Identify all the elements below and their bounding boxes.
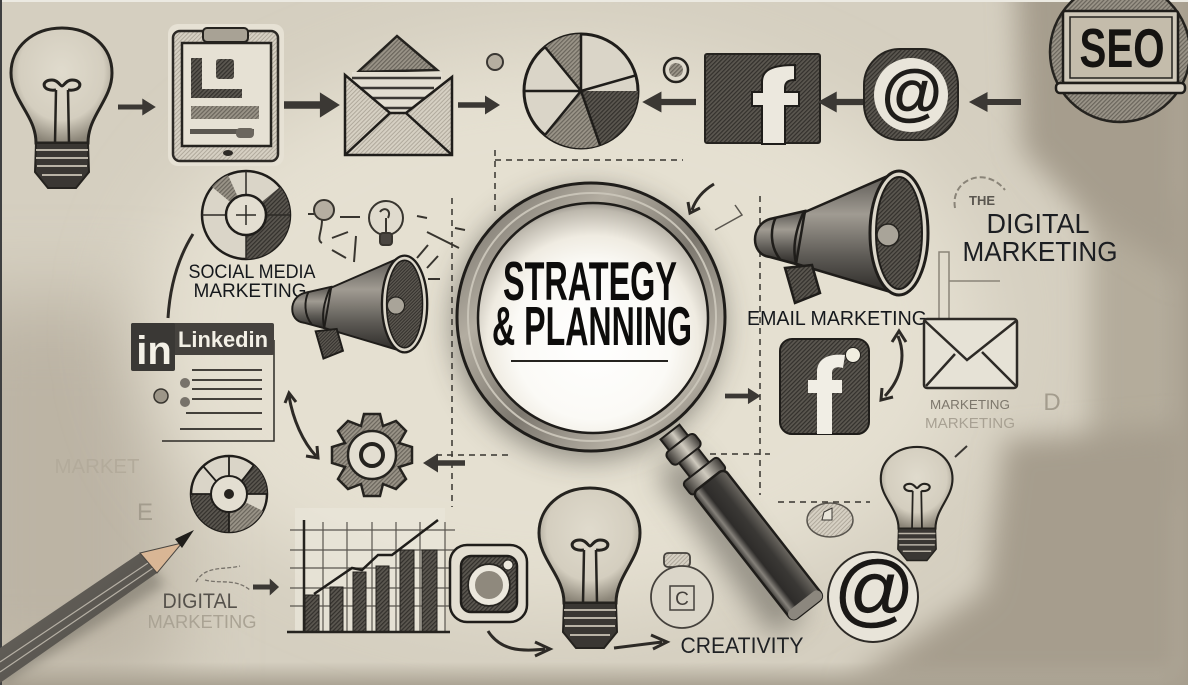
faded market label: MARKET: [54, 456, 140, 478]
icon: facebook square top: [705, 54, 820, 144]
label: creativity: CREATIVITY: [680, 633, 804, 658]
icon: facebook square: [780, 339, 869, 434]
icon: instagram: [450, 545, 527, 622]
heading: email marketing: EMAIL MARKETING: [747, 308, 927, 330]
arrow: curved near lens: [688, 184, 714, 213]
faded labels: MARKETING: [930, 397, 1010, 412]
magnifier handle: [653, 418, 826, 623]
heading: digital marketing: DIGITAL: [986, 208, 1090, 239]
heading: social media marketing: MARKETING: [194, 281, 306, 302]
icon: open envelope: [345, 36, 452, 155]
icon: at symbol top: [864, 49, 958, 140]
icon: megaphone right: [755, 171, 928, 303]
arrow: tablet to envelope: [284, 92, 340, 118]
arrow: envelope to pie: [458, 96, 500, 114]
icon: donut chart lower left: [191, 456, 267, 532]
stamp mark: [955, 177, 1005, 208]
icon: SEO laptop: [1050, 0, 1188, 122]
icon: center bottom bulb: [539, 488, 640, 648]
small circle mark left: [487, 54, 503, 70]
icon: jar sketch: C: [675, 589, 689, 610]
arrow: curved double near gear: [285, 393, 318, 458]
small sketch mark: [807, 503, 853, 537]
title: strategy and planning: & PLANNING: [492, 295, 692, 357]
label: digital marketing small: DIGITAL: [162, 590, 238, 613]
arrow: SEO to at: [969, 92, 1021, 112]
title: strategy and planning: [492, 250, 692, 357]
heading: social media marketing: [188, 262, 316, 302]
icon: ring chart: [202, 171, 290, 259]
panel: email marketing and digital marketing: [725, 171, 1118, 642]
dashed connector lines: [436, 150, 870, 507]
stamp mark: THE: [969, 193, 995, 208]
heading: social media marketing: SOCIAL MEDIA: [188, 262, 316, 283]
arrow: facebook to pie: [642, 92, 696, 112]
title: strategy and planning: STRATEGY: [503, 250, 677, 312]
magnifier lens: [478, 203, 708, 433]
heading: digital marketing: MARKETING: [962, 236, 1118, 267]
faded labels: [925, 397, 1015, 432]
magnifier shadow: [452, 188, 790, 625]
faint letter: D: [1043, 389, 1061, 416]
icon: at symbol bottom: @: [832, 545, 914, 634]
arrow: to creativity: [614, 635, 667, 649]
label: digital marketing small: [148, 590, 256, 632]
faded labels: MARKETING: [925, 415, 1015, 432]
faint sketch post: [939, 252, 1000, 318]
faint letter mark: E: [137, 499, 153, 526]
icon: top left light bulb: [11, 28, 112, 188]
arrow: to gear: [423, 454, 465, 472]
small circle mark right: [664, 58, 688, 82]
icon: pencil: [0, 530, 194, 685]
icon: at symbol top: @: [880, 59, 942, 128]
icon: gear: [332, 414, 412, 496]
tick mark: [955, 446, 967, 457]
magnifier rim: [457, 183, 725, 451]
panel: top row process icons: [11, 0, 1188, 188]
arrow: to chart: [253, 578, 279, 596]
arrow: curved up to ring chart: [168, 234, 193, 318]
panel: social media marketing: [131, 171, 465, 496]
icon: clipboard tablet: [168, 24, 284, 166]
panel: bottom growth row: [0, 456, 804, 685]
arrow: curved double right: [881, 331, 906, 400]
icon: small idea marks: [308, 200, 465, 279]
card: LinkedIn: Linkedin: [178, 327, 268, 352]
icon: envelope right: [924, 319, 1017, 388]
icon: bulb right: [881, 447, 952, 560]
arrow: at to facebook: [818, 92, 871, 112]
small corner mark: [715, 205, 742, 230]
underline: [511, 360, 668, 362]
magnifier rim highlight: [468, 193, 716, 441]
icon: megaphone left: [292, 256, 427, 359]
label: digital marketing small: MARKETING: [148, 612, 256, 632]
magnifying glass: strategy and planning: [452, 183, 826, 625]
scribble: [196, 566, 250, 590]
card: LinkedIn: in: [136, 329, 172, 373]
icon: jar sketch: [651, 553, 713, 628]
arrow: bulb to tablet: [118, 98, 156, 116]
bar chart: [287, 508, 455, 632]
card: LinkedIn: [131, 323, 274, 441]
icon: pie chart: [524, 34, 638, 148]
heading: digital marketing: [962, 208, 1118, 267]
arrow: to facebook: [725, 388, 761, 404]
arrow: curved to bulb: [488, 631, 550, 656]
